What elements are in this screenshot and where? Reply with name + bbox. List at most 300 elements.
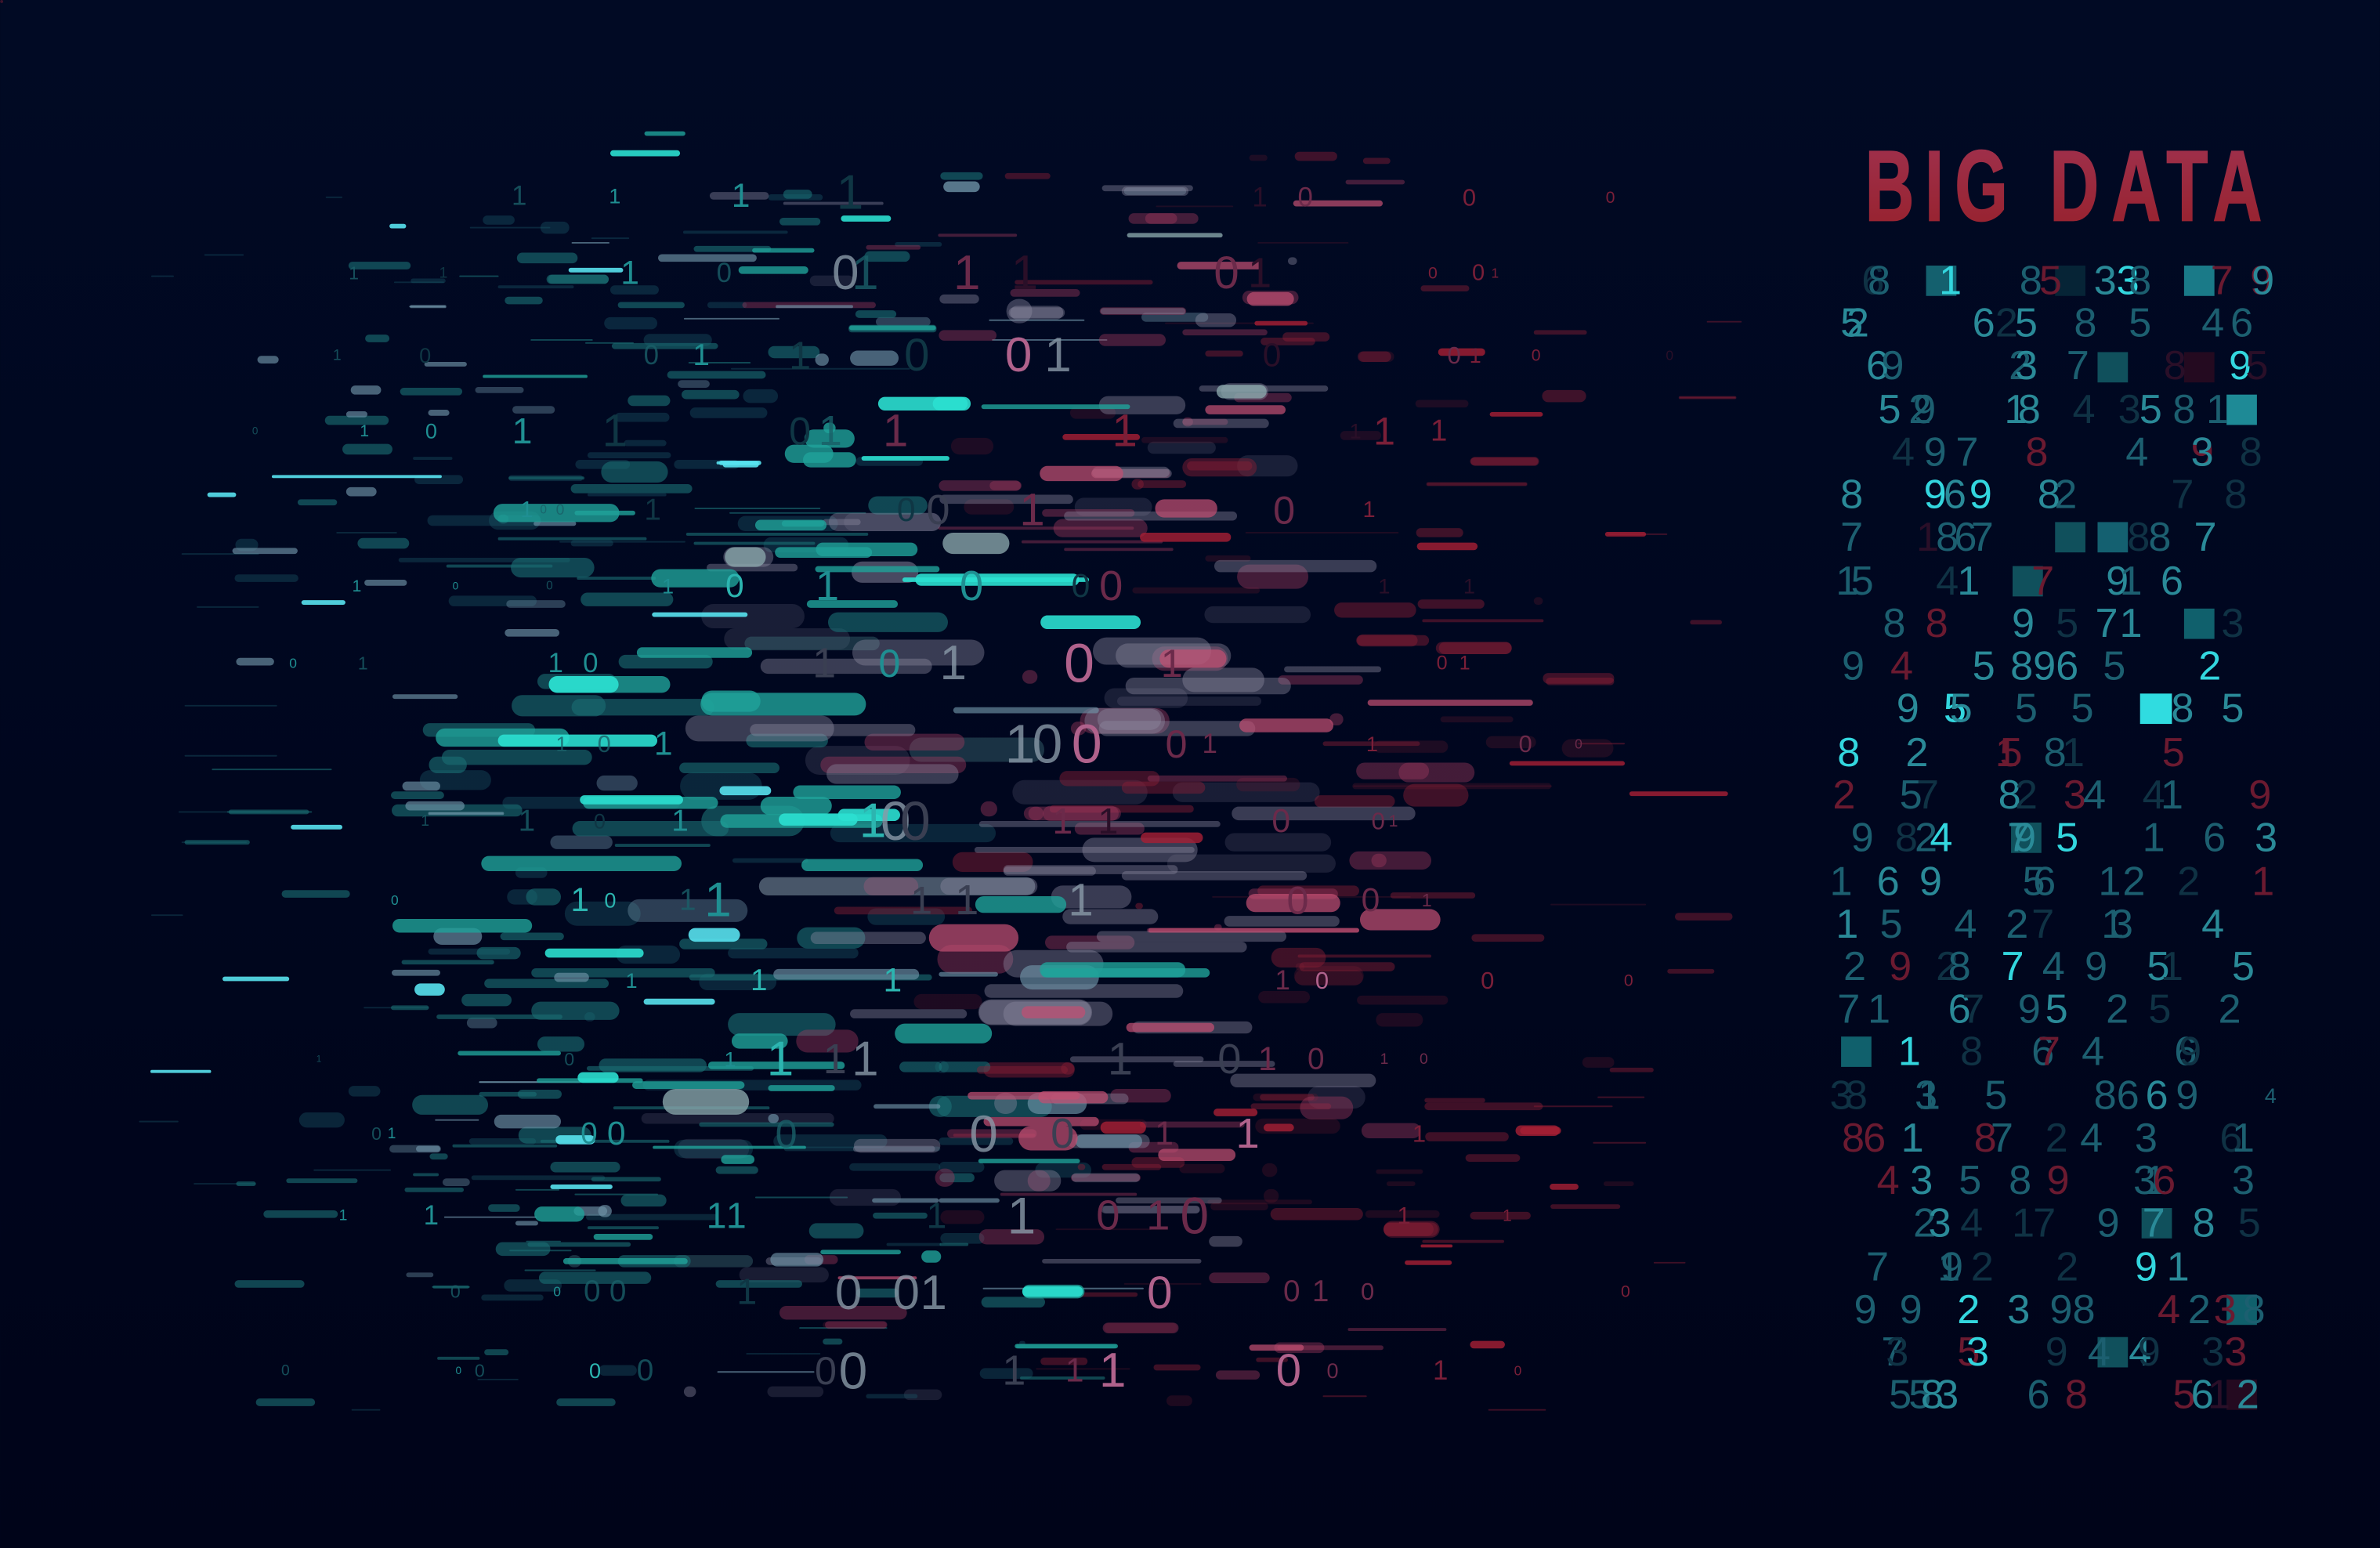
row of binary digits y698: 1 — [823, 1036, 847, 1083]
row of binary digits y336: 1 — [1019, 484, 1045, 535]
matrix digits rows 19-27: 9 — [2049, 1287, 2073, 1333]
matrix digits rows 1-9: 9 — [1924, 472, 1947, 518]
matrix digits rows 19-27: 8 — [2072, 1287, 2096, 1333]
matrix digits rows 19-27: 9 — [1854, 1287, 1877, 1333]
matrix digits rows 1-9: 1 — [1957, 559, 1980, 604]
row of binary digits y802: 1 — [927, 1195, 946, 1236]
matrix digits rows 19-27: 8 — [1974, 1116, 1997, 1161]
matrix digits rows 19-27: 7 — [2143, 1200, 2165, 1246]
matrix digits rows 10-18: 1 — [1868, 986, 1890, 1032]
matrix digits rows 19-27: 2 — [2056, 1245, 2078, 1290]
row of binary digits y594: 1 — [704, 873, 732, 927]
matrix digits rows 19-27: 9 — [2096, 1200, 2120, 1246]
matrix digits rows 10-18: 8 — [2044, 730, 2067, 776]
matrix digits rows 1-9: 9 — [2191, 429, 2214, 475]
row of binary digits y748: 1 — [388, 1125, 396, 1142]
row of binary digits y748: 0 — [776, 1112, 798, 1156]
row of binary digits y852: 1 — [1312, 1275, 1329, 1308]
matrix digits rows 10-18: 5 — [2045, 986, 2068, 1032]
row of binary digits y130: 1 — [1252, 182, 1268, 212]
matrix digits rows 1-9: 2 — [2009, 343, 2031, 389]
matrix digits rows 10-18: 4 — [2143, 772, 2165, 818]
matrix digits rows 10-18: 1 — [1830, 859, 1853, 905]
row of binary digits y438: 1 — [548, 648, 563, 678]
matrix digits rows 19-27: 4 — [2088, 1329, 2111, 1375]
matrix digits rows 1-9: 6 — [2230, 301, 2253, 346]
row of binary digits y438: 1 — [1161, 641, 1183, 685]
matrix digits rows 10-18: 4 — [2083, 772, 2106, 818]
matrix digits rows 10-18: 9 — [2085, 944, 2107, 989]
row of binary digits y130: 1 — [512, 180, 526, 211]
matrix digits rows 19-27: 6 — [1863, 1116, 1886, 1161]
row of binary digits y748: 0 — [371, 1123, 382, 1144]
matrix digits rows 1-9: 7 — [2096, 601, 2118, 646]
row of binary digits y852: 0 — [609, 1275, 626, 1308]
pink and red highlighted streams — [152, 154, 1726, 1347]
row of binary digits y852: 1 — [736, 1271, 757, 1312]
row of binary digits y543: 1 — [671, 805, 689, 838]
matrix digits rows 1-9: 8 — [2127, 515, 2150, 560]
matrix digits rows 1-9: 8 — [2240, 429, 2262, 475]
matrix digits rows 19-27: 8 — [2242, 1287, 2266, 1333]
row of binary digits y852 — [450, 1266, 1630, 1320]
matrix digits rows 10-18: 8 — [1895, 815, 1918, 860]
matrix digits rows 1-9: 4 — [1892, 429, 1915, 475]
row of binary digits y543: 1 — [519, 805, 535, 838]
matrix digits rows 19-27: 5 — [2238, 1200, 2261, 1246]
row of binary digits y284: 1 — [512, 411, 533, 451]
matrix digits rows 10-18: 2 — [2106, 986, 2129, 1032]
row of binary digits y284: 1 — [1373, 409, 1395, 454]
matrix digits rows 19-27: 5 — [1984, 1073, 2007, 1119]
matrix digits rows 1-9: 7 — [1840, 515, 1863, 560]
row of binary digits y235: 0 — [904, 330, 929, 381]
row of binary digits y748: 1 — [1236, 1110, 1260, 1157]
row of binary digits y336: 0 — [556, 501, 565, 519]
row of binary digits y698: 0 — [1420, 1051, 1428, 1068]
matrix digits rows 10-18: 8 — [2171, 686, 2194, 732]
row of binary digits y852: 0 — [1621, 1282, 1630, 1301]
matrix digits rows 19-27: 9 — [1900, 1287, 1922, 1333]
row of binary digits y748: 0 — [607, 1115, 626, 1152]
matrix digits rows 19-27: 7 — [2038, 1029, 2060, 1075]
row of binary digits y386: 1 — [1378, 573, 1391, 598]
matrix digits rows 1-9: 2 — [1995, 301, 2018, 346]
matrix digits rows 1-9: 5 — [2139, 387, 2162, 432]
row of binary digits y336: 0 — [897, 491, 916, 529]
matrix digits rows 1-9: 2 — [1908, 387, 1931, 432]
row of binary digits y438: 1 — [940, 636, 967, 690]
matrix digits rows 10-18: 5 — [2221, 686, 2244, 732]
matrix digits rows 19-27: 7 — [2033, 1200, 2056, 1246]
matrix digits rows 1-9: 9 — [1913, 387, 1936, 432]
matrix digits rows 10-18: 5 — [2103, 643, 2125, 689]
row of binary digits y386: 0 — [1072, 567, 1090, 605]
row of binary digits y802 — [339, 1187, 1512, 1245]
matrix digits rows 10-18: 1 — [2161, 772, 2183, 818]
matrix digits rows 1-9: 8 — [2129, 258, 2151, 303]
matrix digits rows 19-27: 2 — [2188, 1287, 2211, 1333]
matrix digits rows 19-27: 2 — [1913, 1200, 1936, 1246]
matrix digits rows 1-9: 7 — [2171, 472, 2194, 518]
matrix digits rows 19-27: 8 — [1921, 1372, 1944, 1417]
row of binary digits y336: 0 — [926, 486, 950, 533]
matrix digits rows 19-27: 9 — [2179, 1029, 2201, 1075]
matrix digits rows 19-27: 1 — [2012, 1200, 2035, 1246]
matrix digits rows 10-18: 9 — [1842, 643, 1865, 689]
row of binary digits y180: 1 — [1492, 266, 1499, 281]
row of binary digits y490: 0 — [1575, 736, 1582, 751]
matrix digits rows 19-27: 1 — [2208, 1372, 2230, 1417]
row of binary digits y748: 0 — [969, 1105, 998, 1163]
matrix digits rows 10-18: 1 — [2143, 815, 2165, 860]
matrix digits rows 10-18: 3 — [2111, 902, 2133, 947]
teal bright streams — [235, 133, 1260, 1346]
row of binary digits y490: 1 — [555, 732, 568, 756]
matrix digits rows 10-18: 5 — [2147, 944, 2170, 989]
matrix digits rows 10-18: 4 — [1890, 643, 1913, 689]
matrix digits rows 1-9: 5 — [2245, 343, 2268, 389]
thin hairline streams — [139, 197, 1741, 1410]
matrix digits rows 19-27: 9 — [2135, 1245, 2158, 1290]
matrix digits rows 1-9: 3 — [2117, 258, 2139, 303]
matrix digits rows 1-9: 8 — [2025, 429, 2049, 475]
matrix digits rows 1-9: 8 — [2148, 515, 2171, 560]
matrix digits rows 10-18: 2 — [1936, 944, 1959, 989]
row of binary digits y438: 0 — [583, 648, 598, 678]
row of binary digits y284 — [252, 406, 1447, 457]
row of binary digits y802: 1 — [1398, 1202, 1411, 1229]
matrix digits rows 1-9: 9 — [2229, 343, 2252, 389]
row of binary digits y646: 1 — [883, 961, 902, 999]
row of binary digits y904: 0 — [815, 1348, 837, 1393]
matrix digits rows 19-27: 3 — [1936, 1372, 1959, 1417]
matrix digits rows 1-9: 8 — [1936, 515, 1959, 560]
matrix digits rows 1-9: 7 — [2067, 343, 2089, 389]
matrix digits rows 19-27: 3 — [2214, 1287, 2237, 1333]
matrix digits rows 1-9: 1 — [2120, 601, 2143, 646]
row of binary digits y438: 0 — [289, 656, 297, 671]
matrix digits rows 10-18: 1 — [2062, 730, 2085, 776]
row of binary digits y180: 0 — [1472, 261, 1485, 286]
row of binary digits y284: 0 — [252, 425, 258, 437]
matrix digits rows 19-27: 5 — [1959, 1158, 1981, 1203]
matrix digits rows 10-18: 5 — [1879, 902, 1903, 947]
matrix digits rows 10-18 — [1830, 643, 2277, 1032]
row of binary digits y646: 1 — [1275, 965, 1290, 996]
row of binary digits y235: 1 — [1470, 343, 1481, 367]
matrix digits rows 10-18: 2 — [1905, 730, 1928, 776]
matrix digits rows 10-18: 8 — [1948, 944, 1971, 989]
matrix digits rows 1-9: 8 — [2038, 472, 2060, 518]
row of binary digits y594: 0 — [604, 888, 617, 912]
row of binary digits y852: 0 — [1283, 1275, 1300, 1308]
row of binary digits y490: 1 — [1202, 729, 1217, 759]
matrix digits rows 1-9: 5 — [1840, 301, 1863, 346]
matrix digits rows 19-27: 1 — [1937, 1245, 1960, 1290]
row of binary digits y698: 0 — [1308, 1043, 1325, 1076]
matrix digits rows 10-18: 5 — [1973, 643, 1995, 689]
matrix digits rows 1-9: 8 — [2164, 343, 2186, 389]
row of binary digits y336 — [520, 484, 1376, 535]
matrix digits rows 1-9: 5 — [2129, 301, 2151, 346]
row of binary digits y386: 0 — [1099, 562, 1123, 609]
row of binary digits y802: 1 — [1146, 1192, 1170, 1239]
matrix digits rows 1-9: 2 — [1846, 301, 1869, 346]
binary digits — [252, 166, 1673, 1399]
row of binary digits y284: 0 — [789, 409, 811, 454]
matrix digits rows 19-27: 4 — [2158, 1287, 2180, 1333]
matrix digits rows 1-9: 9 — [1881, 343, 1904, 389]
matrix digits rows 19-27: 3 — [2232, 1158, 2255, 1203]
matrix digits rows 19-27: 1 — [1901, 1116, 1924, 1161]
row of binary digits y543: 1 — [1098, 801, 1118, 841]
matrix digits rows 10-18: 7 — [1837, 986, 1860, 1032]
row of binary digits y594: 0 — [1287, 877, 1309, 922]
matrix digits rows 10-18: 5 — [2015, 686, 2038, 732]
row of binary digits y180 — [349, 246, 1499, 300]
matrix digits rows 1-9: 6 — [1973, 301, 1995, 346]
row of binary digits y130: 1 — [609, 183, 620, 208]
matrix digits rows 10-18: 2 — [2006, 902, 2028, 947]
row of binary digits y490: 0 — [1032, 713, 1062, 774]
row of binary digits y284: 1 — [360, 421, 369, 440]
row of binary digits y336: 0 — [1273, 487, 1295, 532]
row of binary digits y438: 0 — [878, 641, 900, 685]
matrix digits rows 1-9: 7 — [2211, 258, 2234, 303]
matrix digits rows 19-27: 6 — [2219, 1116, 2243, 1161]
matrix digits rows 19-27: 9 — [1941, 1245, 1963, 1290]
matrix digits rows 1-9: 8 — [2020, 258, 2042, 303]
matrix digits rows 1-9: 6 — [1866, 343, 1889, 389]
matrix digits rows 19-27: 3 — [2135, 1116, 2158, 1161]
row of binary digits y180: 0 — [1214, 248, 1239, 298]
matrix digits rows 10-18: 9 — [2013, 815, 2036, 860]
matrix digits rows 10-18: 2 — [2122, 859, 2146, 905]
matrix digits rows 10-18: 3 — [2064, 772, 2086, 818]
row of binary digits y336: 1 — [644, 493, 661, 526]
row of binary digits y543: 1 — [1389, 812, 1398, 830]
row of binary digits y543: 1 — [1052, 801, 1072, 841]
matrix digits rows 10-18: 5 — [2148, 986, 2171, 1032]
matrix digits rows 19-27: 7 — [1881, 1329, 1904, 1375]
row of binary digits y802: 1 — [1007, 1187, 1036, 1245]
matrix digits rows 19-27: 6 — [2153, 1158, 2176, 1203]
row of binary digits y130: 0 — [1463, 183, 1476, 211]
row of binary digits y904: 1 — [1065, 1351, 1084, 1389]
matrix digits rows 10-18: 5 — [2000, 730, 2023, 776]
matrix digits rows 10-18: 7 — [1916, 772, 1939, 818]
row of binary digits y543: 0 — [900, 790, 931, 852]
grey and muted pink streams — [689, 182, 1465, 1391]
matrix digits rows 19-27: 3 — [1915, 1073, 1937, 1119]
data stream field — [2, 2, 1741, 1410]
row of binary digits y594: 1 — [570, 881, 589, 919]
matrix digits rows 10-18: 1 — [2101, 902, 2124, 947]
row of binary digits y748: 1 — [1155, 1115, 1174, 1152]
matrix digits rows 1-9: 2 — [2054, 472, 2077, 518]
matrix digits rows 10-18: 4 — [1954, 902, 1977, 947]
matrix digits rows 10-18: 1 — [2098, 859, 2121, 905]
row of binary digits y490: 1 — [1005, 713, 1035, 774]
matrix digits rows 10-18: 2 — [2218, 986, 2241, 1032]
row of binary digits y646: 1 — [751, 964, 768, 997]
row of binary digits y130: 0 — [1298, 182, 1313, 212]
matrix digits rows 19-27: 1 — [2232, 1116, 2255, 1161]
matrix digits rows 1-9: 8 — [2224, 472, 2247, 518]
matrix digits rows 19-27: 4 — [1877, 1158, 1900, 1203]
matrix digits rows 10-18: 2 — [2177, 859, 2200, 905]
row of binary digits y904: 0 — [1327, 1358, 1339, 1383]
matrix digits rows 10-18: 5 — [2071, 686, 2094, 732]
row of binary digits y748: 0 — [581, 1117, 598, 1151]
matrix digits rows 19-27: 8 — [2009, 1158, 2031, 1203]
row of binary digits y594: 1 — [1422, 890, 1432, 910]
matrix digits rows 19-27: 3 — [2007, 1287, 2030, 1333]
matrix digits rows 19-27: 1 — [2144, 1158, 2167, 1203]
matrix digits rows 10-18: 2 — [1832, 772, 1856, 818]
row of binary digits y386: 0 — [725, 567, 744, 605]
row of binary digits y594: 1 — [679, 883, 696, 917]
row of binary digits y594: 1 — [955, 877, 978, 924]
matrix digits rows 1-9: 1 — [2206, 387, 2229, 432]
matrix digits rows 10-18: 5 — [2232, 944, 2255, 989]
row of binary digits y904: 0 — [1514, 1362, 1522, 1378]
row of binary digits y130: 1 — [837, 166, 863, 220]
matrix digits rows 19-27: 3 — [2133, 1158, 2156, 1203]
row of binary digits y180: 1 — [439, 265, 447, 282]
row of binary digits y802: 0 — [1180, 1187, 1209, 1245]
row of binary digits y698: 1 — [724, 1047, 736, 1072]
matrix digits rows 1-9: 8 — [2172, 387, 2195, 432]
matrix digits rows 1-9: 6 — [1954, 515, 1977, 560]
row of binary digits y284: 1 — [819, 407, 842, 454]
matrix digits rows 19-27: 3 — [1830, 1073, 1853, 1119]
matrix digits rows 10-18: 2 — [2015, 772, 2038, 818]
row of binary digits y802: 0 — [1096, 1192, 1119, 1239]
matrix digits rows 19-27: 3 — [1928, 1200, 1951, 1246]
matrix digits rows 19-27: 2 — [2237, 1372, 2259, 1417]
row of binary digits y490: 1 — [1366, 732, 1378, 756]
matrix digits rows 19-27: 4 — [1960, 1200, 1983, 1246]
row of binary digits y748: 1 — [1412, 1120, 1426, 1148]
matrix digits rows 1-9: 8 — [1926, 601, 1948, 646]
matrix digits rows 19-27: 9 — [2138, 1329, 2161, 1375]
row of binary digits y852: 1 — [920, 1266, 947, 1320]
row of binary digits y386: 0 — [546, 579, 553, 592]
row of binary digits y852: 0 — [553, 1284, 561, 1300]
matrix digits rows 1-9: 3 — [2221, 601, 2244, 646]
matrix digits rows 1-9: 5 — [2056, 601, 2078, 646]
row of binary digits y180: 1 — [953, 246, 980, 300]
row of binary digits y904 — [281, 1341, 1522, 1399]
matrix digits rows 10-18: 4 — [1930, 815, 1952, 860]
matrix digits rows 1-9: 6 — [1861, 258, 1884, 303]
teal dim streams — [2, 2, 1734, 1402]
row of binary digits y130: 1 — [732, 177, 750, 215]
matrix digits rows 19-27 — [1830, 1029, 2277, 1417]
matrix digits rows 19-27: 2 — [1957, 1287, 1980, 1333]
row of binary digits y386: 1 — [662, 573, 674, 598]
row of binary digits y802: 1 — [424, 1200, 439, 1231]
row of binary digits y284: 1 — [883, 406, 908, 457]
matrix digits rows 19-27: 9 — [2045, 1329, 2068, 1375]
matrix digits rows 10-18: 7 — [2001, 944, 2024, 989]
row of binary digits y698 — [316, 1033, 1428, 1087]
matrix digits rows 19-27: 5 — [1908, 1372, 1931, 1417]
matrix digits rows 10-18: 6 — [2056, 643, 2078, 689]
matrix digits rows 1-9: 5 — [1879, 387, 1901, 432]
row of binary digits y698: 1 — [316, 1054, 321, 1065]
matrix digits rows 1-9: 4 — [2201, 301, 2224, 346]
row of binary digits y284: 1 — [1112, 406, 1138, 457]
matrix digits rows 19-27: 6 — [2117, 1073, 2139, 1119]
matrix digits rows 10-18: 6 — [2203, 815, 2226, 860]
matrix digits rows 19-27: 8 — [2094, 1073, 2117, 1119]
matrix digits rows 1-9: 4 — [1936, 559, 1959, 604]
row of binary digits y490: 0 — [1166, 722, 1188, 766]
matrix digits rows 19-27: 1 — [1918, 1073, 1941, 1119]
row of binary digits y646: 0 — [1624, 971, 1633, 989]
row of binary digits y235: 1 — [333, 346, 342, 363]
matrix digits rows 1-9: 1 — [1939, 258, 1962, 303]
row of binary digits y235: 1 — [789, 333, 811, 378]
row of binary digits y180: 0 — [717, 258, 732, 288]
row of binary digits y180: 1 — [1248, 250, 1271, 297]
matrix digits rows 10-18: 9 — [1897, 686, 1919, 732]
row of binary digits y852: 0 — [584, 1275, 600, 1308]
matrix digits rows 10-18: 3 — [2255, 815, 2277, 860]
matrix digits rows 19-27: 6 — [2031, 1029, 2054, 1075]
row of binary digits y904: 0 — [475, 1360, 485, 1380]
matrix digits rows 19-27: 8 — [1842, 1116, 1865, 1161]
matrix digits rows 19-27: 8 — [2193, 1200, 2215, 1246]
row of binary digits y543 — [421, 790, 1398, 852]
matrix digits rows 1-9: 8 — [1868, 258, 1890, 303]
row of binary digits y904: 0 — [637, 1354, 653, 1387]
matrix digits rows 19-27: 9 — [2047, 1158, 2070, 1203]
row of binary digits y543: 1 — [859, 794, 886, 848]
matrix digits rows 19-27: 1 — [1898, 1029, 1921, 1075]
matrix digits rows 1-9: 7 — [1971, 515, 1994, 560]
matrix digits rows 1-9: 1 — [2004, 387, 2027, 432]
row of binary digits y386: 0 — [960, 562, 983, 609]
matrix digits rows 1-9: 7 — [2031, 559, 2054, 604]
row of binary digits y386: 1 — [353, 577, 361, 595]
row of binary digits y802: 1 — [1503, 1206, 1512, 1225]
row of binary digits y438: 0 — [1064, 633, 1094, 694]
row of binary digits y646: 1 — [626, 968, 638, 993]
matrix digits rows 1-9: 9 — [2252, 258, 2274, 303]
row of binary digits y130: 0 — [1606, 188, 1615, 207]
row of binary digits y904: 1 — [1433, 1355, 1448, 1386]
row of binary digits y490: 0 — [1072, 713, 1102, 774]
matrix digits rows 1-9: 8 — [2018, 387, 2041, 432]
matrix digits rows 10-18: 2 — [1843, 944, 1866, 989]
row of binary digits y438 — [289, 633, 1470, 694]
number matrix — [1830, 258, 2277, 1417]
row of binary digits y284: 1 — [1350, 419, 1362, 443]
dark grey and deep red backing bars — [646, 157, 1632, 1401]
row of binary digits y646: 0 — [1315, 967, 1329, 994]
matrix digits rows 19-27: 5 — [1889, 1372, 1912, 1417]
matrix digits rows 10-18: 8 — [1998, 772, 2021, 818]
row of binary digits y852: 0 — [1147, 1268, 1172, 1318]
title: BIG DATA — [1865, 131, 2262, 243]
row of binary digits y698: 1 — [1108, 1034, 1133, 1085]
matrix digits rows 1-9: 7 — [1955, 429, 1978, 475]
row of binary digits y904: 0 — [1276, 1345, 1301, 1396]
